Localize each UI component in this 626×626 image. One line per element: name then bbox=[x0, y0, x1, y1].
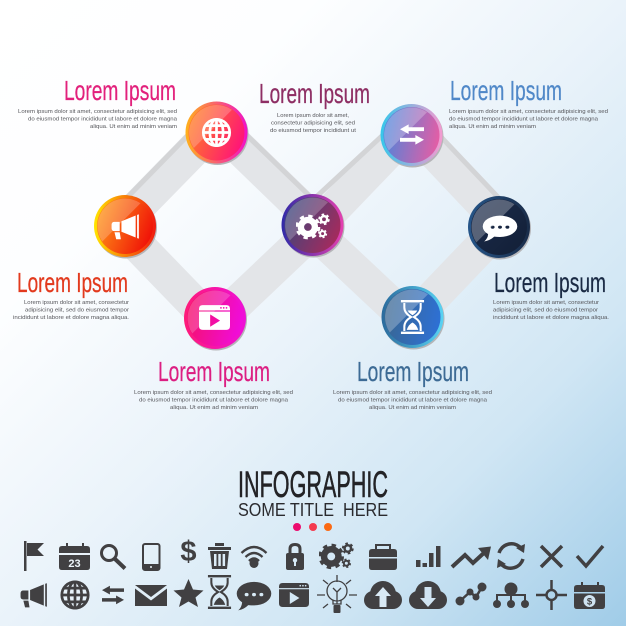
icon: calendar dollar: $ bbox=[587, 596, 593, 608]
icon: bars bbox=[416, 546, 440, 567]
icon: video bbox=[279, 583, 309, 607]
icon: arrows bbox=[400, 124, 424, 145]
node: hourglass bbox=[382, 286, 444, 350]
icon: wifi bbox=[242, 547, 266, 568]
icon: trend bbox=[452, 546, 491, 567]
text block: middle left: Lorem ipsum dolor sit amet, consectetur bbox=[24, 300, 129, 306]
text block: top right: Lorem ipsum dolor sit amet, consectetur adipisicing elit, sed bbox=[449, 109, 608, 115]
text block: top centre: consectetur adipisicing elit, sed bbox=[271, 120, 355, 126]
text block: bottom left bbox=[134, 356, 293, 411]
title: SOME TITLE HERE bbox=[238, 500, 388, 520]
icon: hierarchy bbox=[493, 582, 529, 608]
text block: middle left: incididunt ut labore et dolore magna aliqua. bbox=[13, 315, 129, 321]
text block: top right bbox=[449, 75, 608, 130]
node: megaphone bbox=[94, 195, 157, 258]
icon: calendar: 23 bbox=[68, 558, 81, 570]
text block: top centre: Lorem Ipsum bbox=[259, 78, 370, 109]
text block: top left: Lorem ipsum dolor sit amet, consectetur adipisicing elit, sed bbox=[18, 109, 177, 115]
text block: top left bbox=[18, 75, 178, 130]
icon: globe bbox=[203, 119, 230, 146]
icon: hourglass bbox=[401, 300, 424, 334]
icon: flag bbox=[24, 541, 44, 571]
title bbox=[238, 464, 388, 520]
decorative dots bbox=[293, 523, 332, 531]
icon: sync bbox=[497, 544, 525, 568]
text block: top centre: Lorem ipsum dolor sit amet, bbox=[277, 113, 350, 119]
icon: chat bbox=[483, 216, 517, 241]
diagram connecting bands bbox=[112, 119, 513, 321]
icon row 1 bbox=[24, 536, 603, 571]
text block: bottom right: Lorem Ipsum bbox=[357, 356, 469, 387]
text block: bottom left: aliqua. Ut enim ad minim veniam bbox=[170, 405, 259, 411]
icon: light bulb bbox=[317, 575, 357, 613]
icon: megaphone bbox=[21, 583, 47, 607]
icon: hourglass bbox=[208, 575, 231, 609]
icon: gears bbox=[297, 214, 329, 238]
icon: gears bbox=[320, 543, 353, 568]
node: gears bbox=[282, 194, 344, 258]
icon: calendar dollar bbox=[574, 582, 605, 609]
text block: top right: aliqua. Ut enim ad minim veniam bbox=[449, 124, 537, 130]
icon: mail bbox=[135, 585, 167, 606]
text block: middle right: incididunt ut labore et dolore magna aliqua. bbox=[493, 315, 609, 321]
node: video bbox=[184, 287, 247, 350]
text block: bottom right: Lorem ipsum dolor sit amet, consectetur adipisicing elit, sed bbox=[333, 390, 492, 396]
node: arrows bbox=[380, 104, 444, 168]
icon: nodes bbox=[456, 582, 486, 606]
icon: megaphone bbox=[112, 214, 139, 239]
text block: middle right: adipisicing elit, sed do eiusmod tempor bbox=[493, 308, 598, 314]
text block: top left: do eiusmod tempor incididunt ut labore et dolore magna bbox=[28, 116, 177, 122]
icon: video bbox=[199, 305, 230, 330]
text block: bottom right: aliqua. Ut enim ad minim veniam bbox=[369, 405, 457, 411]
text block: bottom left: Lorem Ipsum bbox=[158, 356, 270, 387]
text block: top centre: do eiusmod tempor incididunt ut bbox=[270, 128, 357, 134]
icon: crosshair bbox=[536, 580, 567, 610]
icon: chat bbox=[237, 582, 271, 610]
icon: cloud upload bbox=[364, 581, 402, 609]
icon: dollar: $ bbox=[180, 536, 197, 568]
node: globe bbox=[186, 102, 248, 165]
text block: top left: aliqua. Ut enim ad minim veniam bbox=[90, 124, 178, 130]
icon: phone bbox=[143, 544, 160, 570]
text block: top right: do eiusmod tempor incididunt ut labore et dolore magna bbox=[449, 116, 598, 122]
title: INFOGRAPHIC bbox=[238, 464, 388, 505]
icon: check bbox=[577, 546, 603, 566]
icon row 2 bbox=[21, 575, 605, 613]
text block: middle left: Lorem Ipsum bbox=[17, 267, 128, 298]
icon: search bbox=[102, 546, 125, 568]
icon: star bbox=[174, 579, 204, 607]
text block: top left: Lorem Ipsum bbox=[64, 75, 176, 106]
icon: close bbox=[541, 546, 562, 567]
text block: middle right: Lorem ipsum dolor sit amet, consectetur bbox=[493, 300, 599, 306]
icon: trash bbox=[208, 543, 231, 569]
text block: bottom left: do eiusmod tempor incididunt ut labore et dolore magna bbox=[139, 398, 288, 404]
node: chat bbox=[468, 196, 531, 260]
icon: lock bbox=[286, 544, 304, 570]
icon: cloud download bbox=[409, 581, 447, 609]
text block: middle right bbox=[493, 267, 609, 321]
text block: middle left bbox=[13, 267, 129, 321]
icon: calendar bbox=[59, 543, 90, 570]
text block: bottom right: do eiusmod tempor incididunt ut labore et dolore magna bbox=[338, 398, 487, 404]
text block: top right: Lorem Ipsum bbox=[450, 75, 562, 106]
text block: bottom right bbox=[333, 356, 492, 411]
icon: globe bbox=[62, 582, 88, 608]
text block: middle left: adipisicing elit, sed do eiusmod tempor bbox=[25, 308, 129, 314]
icon: briefcase bbox=[369, 545, 397, 570]
text block: bottom left: Lorem ipsum dolor sit amet, consectetur adipisicing elit, sed bbox=[134, 390, 293, 396]
icon: arrows bbox=[102, 586, 124, 604]
text block: top centre bbox=[259, 78, 370, 134]
